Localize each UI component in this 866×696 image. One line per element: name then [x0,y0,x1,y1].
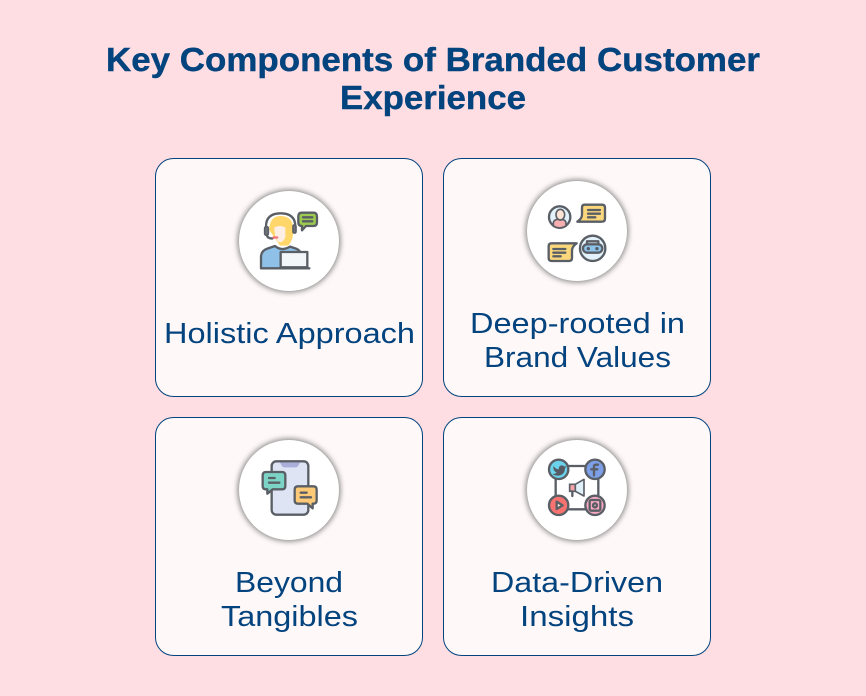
icon: phone with chat bubbles [263,461,317,515]
icon: agent with headset and laptop [261,213,317,268]
label: Beyond [235,567,343,599]
label: Holistic Approach [164,318,415,350]
label: Brand Values [484,342,671,374]
icon: social media icons around megaphone [549,460,605,515]
title: Key Components of Branded Customer [106,41,760,78]
title [106,41,760,116]
icon badge: person and chatbot conversation [526,180,628,282]
label [470,308,685,374]
icon: person and robot with speech bubbles [549,205,605,261]
label: Deep-rooted in [470,308,685,340]
panel: Holistic Approach [156,158,422,396]
panel: Deep-rooted in Brand Values [444,158,710,396]
label: Tangibles [221,601,358,633]
label [221,567,358,633]
icon badge: social media network [526,438,628,542]
icon badge: smartphone chat [238,438,340,542]
title: Experience [340,79,526,116]
label [491,567,663,633]
icon badge: customer support agent [238,190,340,292]
label: Data-Driven [491,567,663,599]
label: Insights [520,601,634,633]
panel: Data-Driven Insights [444,418,710,656]
panel: Beyond Tangibles [156,418,422,656]
